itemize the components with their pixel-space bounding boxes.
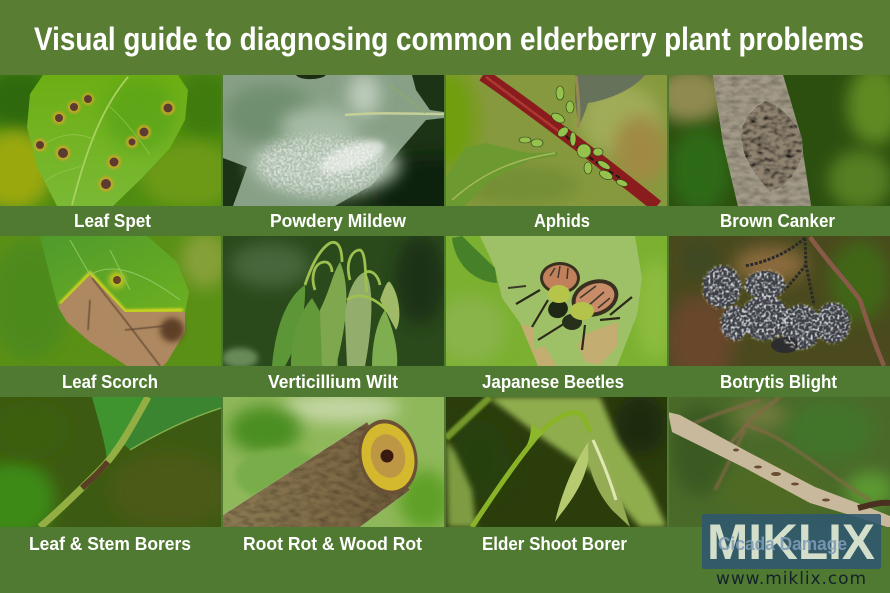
- photo: drooping green shoot: [446, 395, 667, 527]
- panel: elder shoot borer: [446, 395, 667, 554]
- panel: botrytis blight: [665, 236, 890, 392]
- label: Aphids: Aphids: [534, 211, 590, 231]
- panel: root rot and wood rot: [223, 394, 451, 554]
- panel: powdery mildew: [223, 75, 444, 231]
- label: Elder Shoot Borer: Elder Shoot Borer: [482, 534, 627, 554]
- photo: cut branch with rotted center: [223, 394, 451, 530]
- label: Leaf & Stem Borers: Leaf & Stem Borers: [29, 534, 191, 554]
- label: Powdery Mildew: Powdery Mildew: [270, 211, 407, 231]
- photo: berries with gray mold: [669, 236, 890, 366]
- label: Leaf Scorch: Leaf Scorch: [62, 372, 158, 392]
- panel: verticillium wilt: [222, 235, 445, 392]
- photo: two beetles on chewed leaf: [434, 236, 675, 366]
- label: Root Rot & Wood Rot: Root Rot & Wood Rot: [243, 534, 422, 554]
- label: Botrytis Blight: Botrytis Blight: [720, 372, 837, 392]
- photo: green stem with damage: [0, 397, 221, 527]
- label seen through logo: Cicada Damage: [718, 534, 847, 554]
- panel: leaf and stem borers: [0, 397, 230, 554]
- photo: leaf with brown spots: [0, 75, 221, 206]
- label: Japanese Beetles: Japanese Beetles: [482, 372, 624, 392]
- label: Brown Canker: Brown Canker: [720, 211, 835, 231]
- photo: leaf with brown scorched tip: [0, 232, 229, 366]
- panel: brown canker: [669, 75, 890, 227]
- panel: aphids: [446, 75, 667, 231]
- label: Cicada Damage: Cicada Damage: [718, 534, 847, 554]
- panel: leaf spot: [0, 75, 221, 231]
- panel: leaf scorch: [0, 232, 229, 392]
- panel: japanese beetles: [434, 236, 675, 392]
- label: Verticillium Wilt: Verticillium Wilt: [268, 372, 398, 392]
- label: Leaf Spet: Leaf Spet: [74, 211, 151, 231]
- photo: leaf with white powder: [223, 75, 444, 206]
- header band: [0, 0, 890, 75]
- photo: branch with canker: [669, 75, 890, 206]
- panel: cicada damage: [669, 397, 890, 527]
- photo: twig with slits: [668, 397, 890, 528]
- watermark logo: MIKLIX: [702, 514, 881, 589]
- logo plate: [702, 514, 881, 569]
- photo: wilted drooping leaves: [222, 235, 445, 368]
- logo url: www.miklix.com: [716, 569, 866, 589]
- logo wordmark: MIKLIX: [707, 514, 875, 570]
- photo: red stem with green aphids: [446, 75, 667, 206]
